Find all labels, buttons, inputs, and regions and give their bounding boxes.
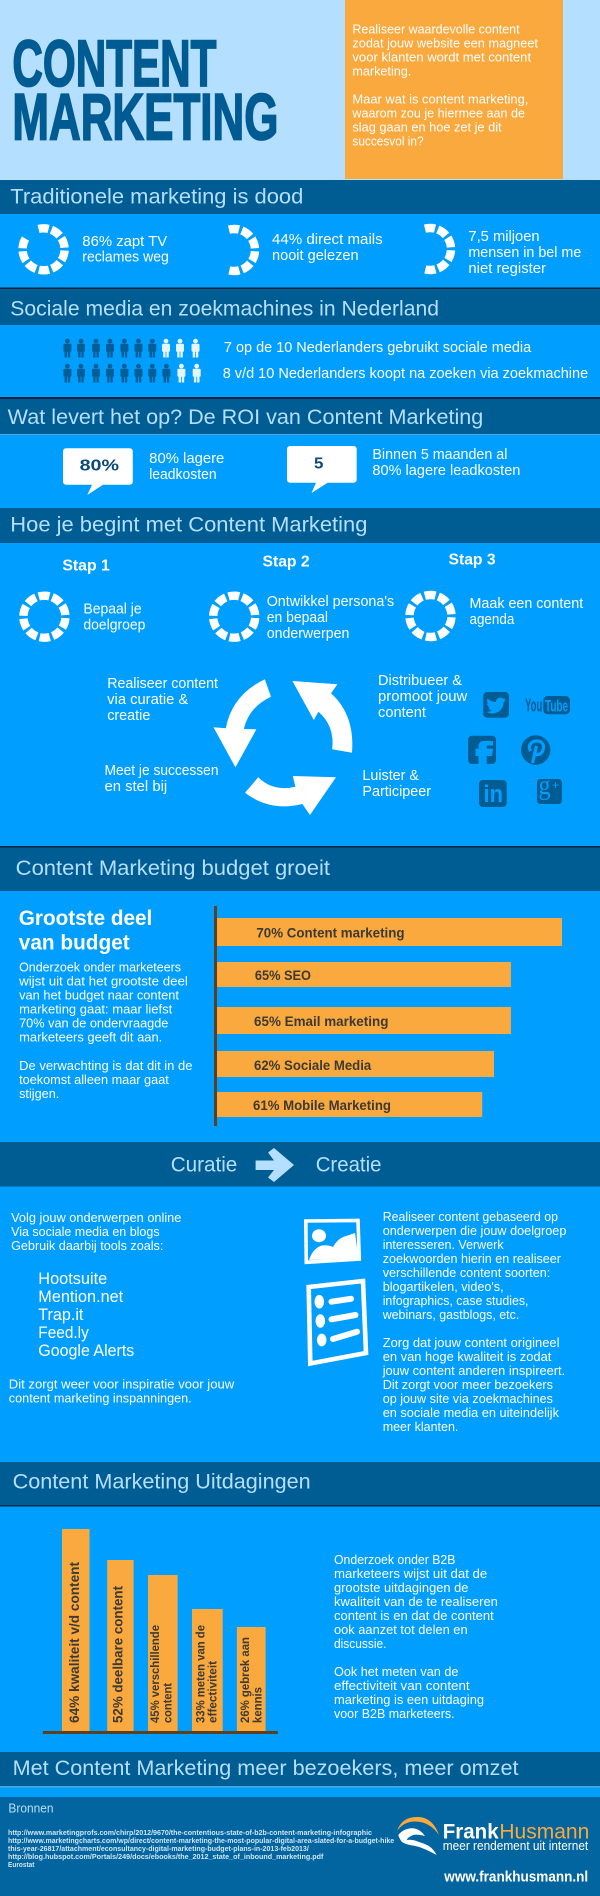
panel: creatie text <box>382 1209 566 1434</box>
stat: 86% <box>82 234 169 266</box>
icon: ring 7,5 miljoen <box>405 224 455 274</box>
header panel <box>0 0 600 180</box>
icon: youtube: Tube <box>545 696 568 716</box>
heading: traditionele marketing <box>0 180 600 214</box>
heading: meer bezoekers <box>0 1752 600 1788</box>
bar: SEO: 65% SEO <box>255 968 311 983</box>
step 3: Maak een content <box>470 596 583 612</box>
bar: content marketing <box>217 918 562 946</box>
bar: verschillende <box>148 1575 178 1731</box>
step 2: Stap 2 <box>262 554 310 571</box>
step 2: onderwerpen <box>267 626 349 642</box>
logo: frank husmann: meer rendement uit internet <box>443 1838 589 1853</box>
heading: traditionele marketing: Traditionele marketing is dood <box>10 184 303 208</box>
text block: onderzoek B2B: kwaliteit van de te realiseren <box>334 1594 498 1609</box>
text block: sources: http://www.marketingprofs.com/chirp/2012/9670/the-contentious-state-of-b2b-content-marketing-infographic <box>8 1828 372 1837</box>
heading: ROI: Wat levert het op? De ROI van Content Marketing <box>8 405 483 429</box>
text block: inspiratie: content marketing inspanningen. <box>9 1390 192 1405</box>
step 3: agenda <box>470 612 515 628</box>
title <box>12 26 278 153</box>
text block: inspiratie <box>9 1376 235 1405</box>
step 2: en bepaal <box>267 610 328 626</box>
text: binnen 5 maanden: Binnen 5 maanden al <box>372 447 507 463</box>
panel: creatie text: op jouw site via zoekmachines <box>383 1391 553 1406</box>
panel: creatie text: infographics, case studies, <box>383 1293 528 1308</box>
stat: 7,5 miljoen: mensen in bel me <box>468 245 581 261</box>
icon: google plus: + <box>552 778 559 792</box>
text block: onderzoek B2B: Onderzoek onder B2B <box>334 1552 455 1567</box>
stat: 7,5 miljoen <box>468 229 581 277</box>
text block: volg <box>11 1210 181 1253</box>
bar: mobile: 61% Mobile Marketing <box>253 1098 391 1113</box>
heading: curatie creatie <box>0 1142 600 1186</box>
heading: uitdagingen <box>0 1462 600 1506</box>
text block: onderzoek B2B <box>334 1552 498 1721</box>
heading: grootste deel: Grootste deel <box>19 907 152 930</box>
step 2: Ontwikkel persona's <box>267 594 394 610</box>
title: CONTENT <box>12 26 216 100</box>
icon: ring 44% <box>209 225 259 275</box>
bar: deelbare <box>107 1560 134 1731</box>
panel: cycle <box>104 673 468 815</box>
stat: 7,5 miljoen: 7,5 miljoen <box>468 229 540 245</box>
text block: volg: Gebruik daarbij tools zoals: <box>11 1238 163 1253</box>
intro panel: marketing. <box>352 63 411 78</box>
logo: frank husmann: Husmann <box>499 1819 589 1843</box>
panel: creatie text: verschillende content soorten: <box>383 1265 550 1280</box>
icon: list document <box>309 1281 366 1364</box>
list: tools: Mention.net <box>38 1287 123 1306</box>
callout: 80%: 80% <box>80 458 119 475</box>
panel: creatie text: Realiseer content gebaseerd op <box>383 1209 558 1224</box>
text block: onderzoek: Onderzoek onder marketeers <box>19 960 181 975</box>
text block: sources: this-year-26817/attachment/econsultancy-digital-marketing-budget-plans-in-2013-feb2013/ <box>8 1844 310 1853</box>
text: 80% lagere leadkosten: 80% lagere <box>149 451 224 467</box>
panel: curatie <box>9 1210 235 1405</box>
panel: creatie text: webinars, gastblogs, etc. <box>382 1307 519 1322</box>
panel: creatie text: meer klanten. <box>383 1419 458 1434</box>
text block: onderzoek B2B: voor B2B marketeers. <box>334 1706 455 1721</box>
text block: volg: Via sociale media en blogs <box>11 1224 160 1239</box>
text block: inspiratie: Dit zorgt weer voor inspiratie voor jouw <box>9 1376 235 1391</box>
bar: meten: 33% meten van de <box>194 1625 208 1723</box>
intro panel: waarom zou je hiermee aan de <box>351 105 525 120</box>
panel: ROI <box>63 446 520 495</box>
text block: onderzoek B2B: effectiviteit van content <box>334 1678 470 1693</box>
text block: onderzoek B2B: marketing is een uitdaging <box>334 1692 484 1707</box>
bar: kwaliteit: 64% kwaliteit v/d content <box>66 1562 82 1723</box>
heading: budget groeit: Content Marketing budget groeit <box>16 856 330 880</box>
heading: bronnen: Bronnen <box>8 1801 54 1816</box>
step 1: Stap 1 <box>62 558 110 575</box>
heading: uitdagingen: Content Marketing Uitdagingen <box>13 1469 311 1493</box>
label: luister: Luister & <box>362 768 419 784</box>
icon: google plus <box>537 770 562 804</box>
bar: sociale media: 62% Sociale Media <box>254 1058 372 1073</box>
heading: curatie creatie: Creatie <box>316 1152 382 1176</box>
text block: onderzoek B2B: ook aanzet tot delen en <box>334 1622 468 1637</box>
intro panel: slag gaan en hoe zet je dit <box>352 119 502 134</box>
label: distribueer: Distribueer & <box>378 673 462 689</box>
text block: sources: http://www.marketingcharts.com/wp/direct/content-marketing-the-most-popular-digital-area-slated-for-a-budget-hike <box>8 1836 394 1845</box>
stat: 44% <box>272 232 383 264</box>
list: tools: Feed.ly <box>38 1323 89 1342</box>
arrow: left <box>214 679 271 767</box>
icon: pinterest <box>521 735 550 765</box>
panel: creatie text: jouw content anderen inspireert. <box>382 1363 565 1378</box>
text block: onderzoek B2B: marketeers wijst uit dat de <box>334 1566 487 1581</box>
heading: meer bezoekers: Met Content Marketing meer bezoekers, meer omzet <box>13 1756 519 1780</box>
logo: frank husmann: Frank <box>443 1819 499 1843</box>
label: luister <box>362 768 431 800</box>
callout: 5 <box>287 446 357 493</box>
text block: onderzoek: De verwachting is dat dit in de <box>19 1058 192 1073</box>
panel: grootste deel van budget <box>18 907 192 1101</box>
text block: onderzoek: van het budget naar content <box>19 988 179 1003</box>
panel: creatie text: en van hoge kwaliteit is zodat <box>383 1349 552 1364</box>
text block: onderzoek: marketeers geeft dit aan. <box>19 1030 162 1045</box>
panel: stappen <box>19 552 583 642</box>
panel: social icons <box>468 692 570 808</box>
bar: sociale media <box>217 1051 494 1077</box>
icon row: 7 van 10 <box>63 339 200 358</box>
arrow: curatie to creatie <box>256 1148 294 1182</box>
stat: 44%: 44% direct mails <box>272 232 383 248</box>
label: realiseer content: creatie <box>107 708 150 724</box>
bar: verschillende: content <box>160 1683 174 1723</box>
intro panel: Maar wat is content marketing, <box>352 91 528 106</box>
label: realiseer content: Realiseer content <box>107 676 218 692</box>
heading: curatie creatie: Curatie <box>171 1152 237 1176</box>
heading: grootste deel <box>19 907 152 954</box>
bar chart: budget <box>214 906 562 1126</box>
intro panel: voor klanten wordt met content <box>352 49 531 64</box>
panel: sociale media stats <box>63 339 588 382</box>
panel: creatie text: Dit zorgt voor meer bezoekers <box>383 1377 553 1392</box>
heading: grootste deel: van budget <box>19 931 130 954</box>
arrow: right <box>292 681 352 753</box>
step 1: Bepaal je <box>83 601 142 617</box>
icon row: 8 van 10 <box>63 364 201 382</box>
step 3 <box>405 552 583 641</box>
stat: 7,5 miljoen: niet register <box>468 261 546 277</box>
label: meet je successen: en stel bij <box>104 779 167 795</box>
text block: onderzoek: wijst uit dat het grootste deel <box>18 974 188 989</box>
bar: meten: effectiviteit <box>206 1661 220 1723</box>
text block: volg: Volg jouw onderwerpen online <box>11 1210 181 1225</box>
text block: sources: http://blog.hubspot.com/Portals/249/docs/ebooks/the_2012_state_of_inbound_marketing.pdf <box>8 1852 324 1861</box>
intro panel: Realiseer waardevolle content <box>352 21 520 36</box>
panel: creatie text: onderwerpen die jouw doelgroep <box>383 1223 566 1238</box>
label: meet je successen <box>104 763 218 795</box>
stat: 44%: nooit gelezen <box>272 248 359 264</box>
text block: onderzoek: stijgen. <box>19 1086 59 1101</box>
stat: 86%: reclames weg <box>82 250 169 266</box>
panel: creatie text: blogartikelen, video's, <box>383 1279 504 1294</box>
icon: linkedin: in <box>484 781 503 808</box>
label: distribueer <box>378 673 468 721</box>
bar: email <box>217 1007 511 1034</box>
bar: verschillende: 45% verschillende <box>148 1625 162 1723</box>
panel: creatie text: zoekwoorden hierin en realiseer <box>383 1251 562 1266</box>
label: meet je successen: Meet je successen <box>104 763 218 779</box>
text block: sources <box>8 1828 394 1869</box>
stat: 8 v/d 10: 8 v/d 10 Nederlanders koopt na zoeken via zoekmachine <box>223 366 588 382</box>
heading: sociale media: Sociale media en zoekmachines in Nederland <box>10 297 439 321</box>
callout: 80% <box>63 448 133 495</box>
heading: hoe je begint: Hoe je begint met Content Marketing <box>10 513 367 537</box>
bar: content marketing: 70% Content marketing <box>256 925 404 940</box>
bar: kwaliteit <box>62 1529 90 1731</box>
bar: deelbare: 52% deelbare content <box>110 1586 126 1723</box>
stat: 7 op 10: 7 op de 10 Nederlanders gebruikt sociale media <box>224 340 532 356</box>
text block: onderzoek B2B: discussie. <box>334 1636 386 1651</box>
bar: kennis: kennis <box>250 1687 264 1723</box>
bar: email: 65% Email marketing <box>254 1014 388 1029</box>
text: website url: www.frankhusmann.nl <box>443 1869 588 1886</box>
heading: ROI <box>0 399 600 435</box>
step 1: doelgroep <box>83 617 145 633</box>
text block: onderzoek: toekomst alleen maar gaat <box>19 1072 169 1087</box>
icon: ring 86% <box>18 224 69 275</box>
stat: 86%: 86% zapt TV <box>82 234 167 250</box>
icon: twitter <box>483 692 509 718</box>
panel: creatie text: Zorg dat jouw content origineel <box>383 1335 560 1350</box>
heading: budget groeit <box>0 848 600 891</box>
panel: footer <box>0 1797 600 1896</box>
heading: hoe je begint <box>0 508 600 543</box>
text block: onderzoek: 70% van de ondervraagde <box>19 1016 168 1031</box>
icon: youtube: You <box>525 696 542 716</box>
bar: kennis: 26% gebrek aan <box>238 1637 252 1723</box>
icon: google plus: g <box>538 770 550 800</box>
text: binnen 5 maanden: 80% lagere leadkosten <box>372 463 520 479</box>
text block: onderzoek B2B: grootste uitdagingen de <box>334 1580 468 1595</box>
intro panel <box>345 0 563 179</box>
label: luister: Participeer <box>362 784 431 800</box>
intro panel: succesvol in? <box>352 133 424 148</box>
bar chart: uitdagingen <box>43 1529 278 1734</box>
list: tools: Trap.it <box>38 1305 84 1324</box>
bar: SEO <box>217 962 511 987</box>
list: tools: Hootsuite <box>38 1269 107 1288</box>
label: distribueer: content <box>378 705 426 721</box>
label: realiseer content: via curatie & <box>107 692 189 708</box>
label: realiseer content <box>107 676 218 724</box>
panel: creatie text: interesseren. Verwerk <box>383 1237 504 1252</box>
arrow: bottom <box>245 776 336 815</box>
step 2 <box>209 554 394 642</box>
panel: traditionele marketing stats <box>0 214 600 288</box>
text: binnen 5 maanden <box>372 447 520 479</box>
panel: creatie text: en sociale media en uiteindelijk <box>383 1405 559 1420</box>
list: tools: Google Alerts <box>38 1341 134 1360</box>
list: tools <box>38 1269 134 1360</box>
heading: sociale media <box>0 289 600 325</box>
step 3: Stap 3 <box>448 552 496 569</box>
text: 80% lagere leadkosten: leadkosten <box>149 467 217 483</box>
title: MARKETING <box>12 79 278 153</box>
text: 80% lagere leadkosten <box>149 451 224 483</box>
step 1 <box>19 558 145 642</box>
intro panel: zodat jouw website een magneet <box>352 35 538 50</box>
bar: mobile <box>217 1092 482 1117</box>
text block: onderzoek B2B: content is en dat de content <box>334 1608 494 1623</box>
text block: onderzoek B2B: Ook het meten van de <box>334 1664 458 1679</box>
bar: kennis <box>237 1627 266 1731</box>
text block: onderzoek <box>18 960 192 1101</box>
callout: 5: 5 <box>314 456 323 473</box>
logo: frank husmann <box>397 1817 589 1855</box>
icon: facebook <box>468 736 496 764</box>
bar: meten <box>192 1609 223 1731</box>
text block: onderzoek: marketing gaat: maar liefst <box>19 1002 173 1017</box>
text block: sources: Eurostat <box>8 1860 35 1869</box>
label: distribueer: promoot jouw <box>378 689 468 705</box>
icon: image <box>306 1220 359 1262</box>
